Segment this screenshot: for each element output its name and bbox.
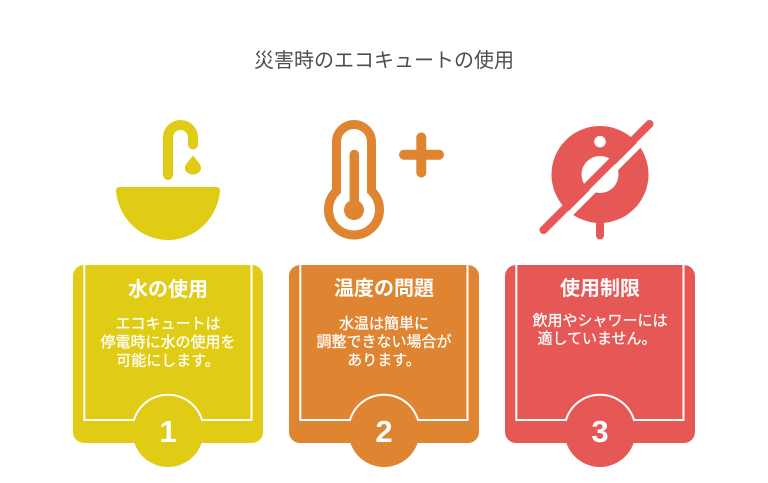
number 2: 2	[375, 414, 393, 449]
panel: usage limits	[505, 264, 695, 467]
icon: faucet and sink	[116, 125, 220, 240]
text: temperature description: 水温は簡単に	[339, 314, 429, 332]
text: water use description: エコキュートは	[115, 316, 221, 332]
text: usage limits description: 飲用やシャワーには	[532, 312, 668, 330]
heading: water use: 水の使用	[128, 278, 208, 301]
text: water use description: 停電時に水の使用を	[100, 334, 236, 351]
text: temperature description: あります。	[347, 352, 421, 369]
text: temperature description: 調整できない場合が	[316, 334, 452, 350]
title: 災害時のエコキュートの使用	[254, 49, 514, 72]
number 3: 3	[591, 414, 609, 449]
icon: no drinking or shower	[540, 124, 660, 244]
panel: temperature problem	[289, 264, 479, 467]
number 1: 1	[159, 414, 177, 449]
heading: usage limits: 使用制限	[560, 277, 640, 300]
heading: temperature problem: 温度の問題	[334, 277, 434, 300]
icon: thermometer plus	[328, 124, 439, 235]
text: water use description: 可能にします。	[116, 352, 220, 370]
panel: water use	[73, 264, 263, 467]
text: usage limits description: 適していません。	[537, 330, 657, 348]
